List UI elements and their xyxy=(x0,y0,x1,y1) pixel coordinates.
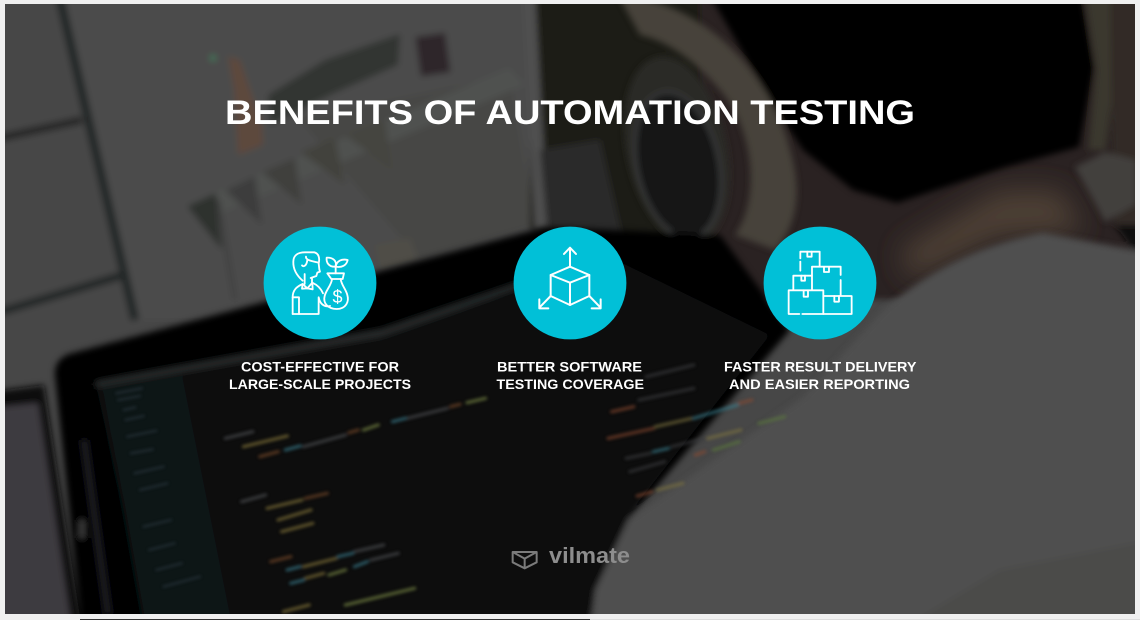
icon: cube with arrows xyxy=(514,227,626,339)
next slide sliver xyxy=(0,614,1140,620)
ear cup xyxy=(624,56,728,239)
icon: person with money bag: $ xyxy=(332,287,343,307)
back room dark xyxy=(528,4,703,235)
caption: FASTER RESULT DELIVERY xyxy=(724,358,917,374)
neck base xyxy=(700,0,1140,300)
icon: stacked boxes xyxy=(764,227,876,339)
laptop body xyxy=(55,227,790,620)
figurine and pictures xyxy=(228,56,263,155)
caption: COST-EFFECTIVE FOR xyxy=(241,358,399,374)
head xyxy=(700,0,1094,203)
caption: LARGE-SCALE PROJECTS xyxy=(229,376,411,392)
neck highlight xyxy=(900,190,1085,280)
benefit: cost-effective xyxy=(229,227,411,392)
title: BENEFITS OF AUTOMATION TESTING xyxy=(225,94,915,132)
window frame xyxy=(58,0,135,320)
caption: AND EASIER REPORTING xyxy=(729,376,910,392)
headphone band xyxy=(618,0,797,250)
benefit: delivery xyxy=(724,227,917,392)
icon: person with money bag xyxy=(264,227,376,339)
caption: BETTER SOFTWARE xyxy=(497,358,642,374)
code lines xyxy=(116,365,785,612)
caption: TESTING COVERAGE xyxy=(496,376,644,392)
icon: logo mark xyxy=(513,552,537,568)
wordmark: vilmate xyxy=(549,543,630,568)
logo: vilmate xyxy=(513,543,630,568)
benefit: coverage xyxy=(496,227,644,392)
right headphone band xyxy=(1084,0,1112,150)
far left monitor xyxy=(0,385,82,620)
shelf xyxy=(338,78,510,159)
laptop screen xyxy=(96,262,770,620)
shirt xyxy=(590,233,1140,620)
